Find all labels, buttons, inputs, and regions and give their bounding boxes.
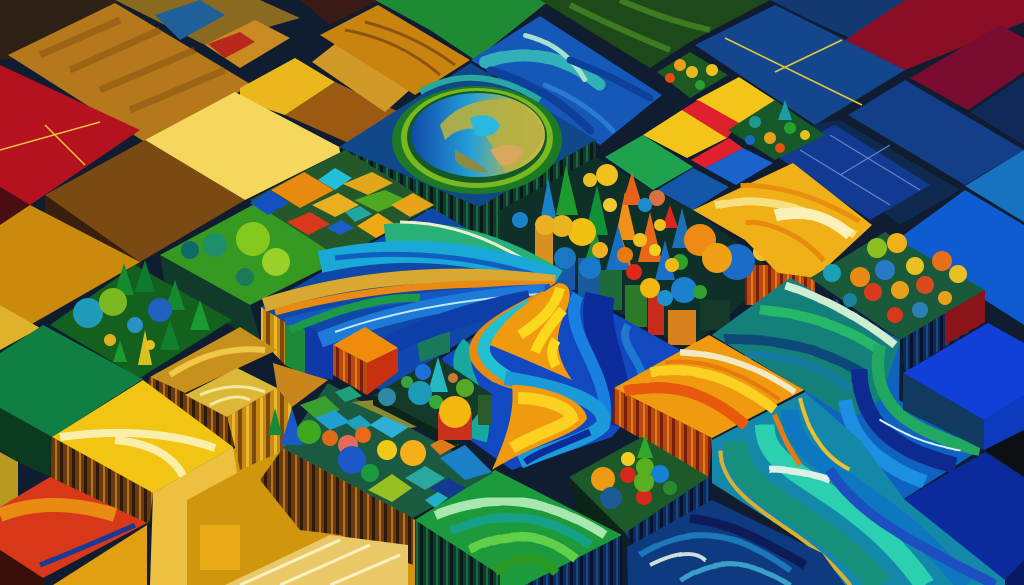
panel: small top tree clusters [657,52,825,160]
panel: left tree cluster [50,260,232,378]
panel: left colour blocks [0,65,345,507]
panel: top-left ochre tiles [0,0,470,148]
panel: central swirl [442,282,684,470]
panel: teal wave tile and waterfall [712,278,980,500]
panel: rainbow stripes tile [261,208,557,395]
panel: lower teal waterfall and orange tile [612,335,1005,585]
icon: green ring [392,86,562,194]
panel: top green and blue waves [375,0,770,145]
panel: golden wave tile [693,163,872,310]
panel: top-right blue panels and reds [605,0,1024,325]
panel: right ball cluster [810,232,985,375]
panel: bottom navy waves [627,500,845,585]
panel: bottom-left gold cliffs [0,327,415,585]
orange block [333,327,398,395]
panel: left forest and small tiles [160,150,435,345]
panel: right blue blocks [902,323,1024,585]
panel: small tree tile [373,357,493,447]
icon: globe [411,93,545,177]
panel: earth globe tile [339,63,596,245]
panel: lower right tree cluster [569,435,709,555]
panel: lower centre tree cluster [268,383,493,518]
panel: green swirl tile [415,470,622,585]
panel: central forest [500,157,780,350]
